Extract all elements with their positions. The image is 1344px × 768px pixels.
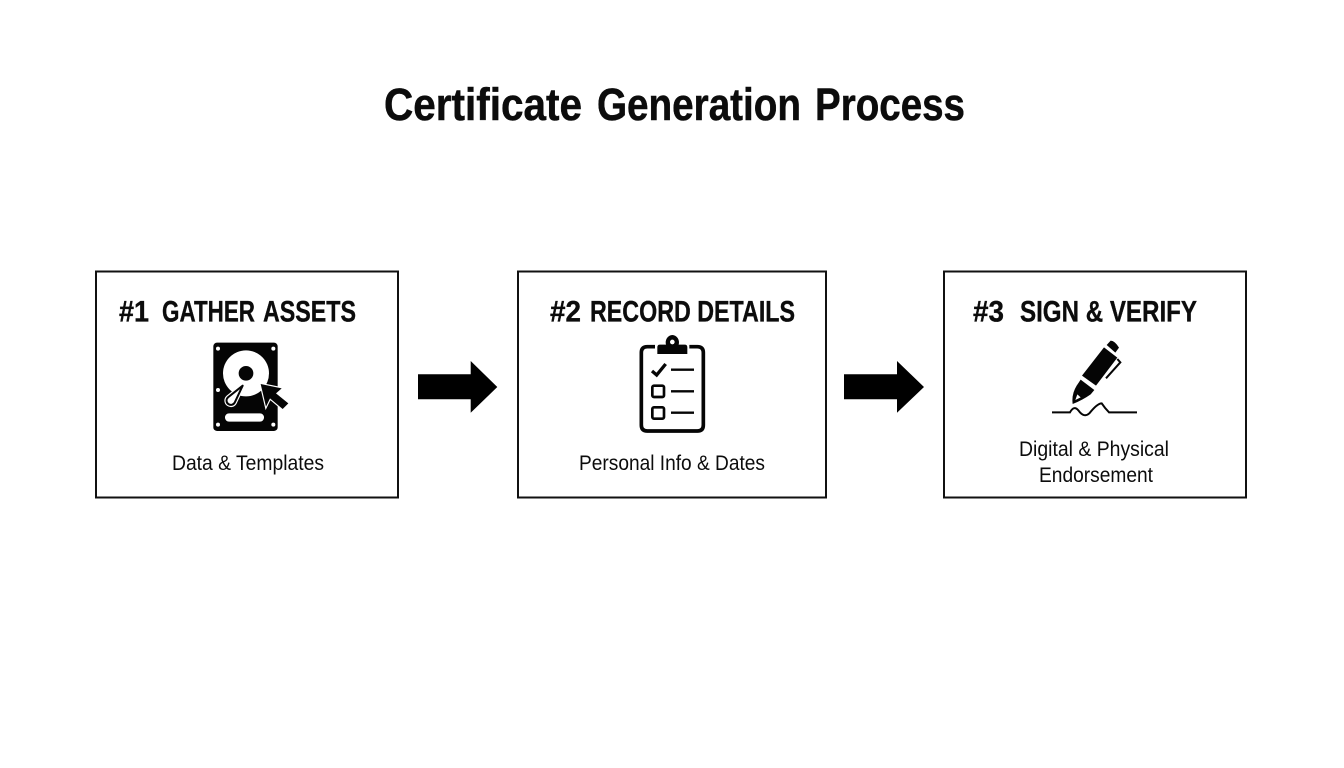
caption: step 3: Digital & Physical — [1019, 437, 1169, 461]
heading: step 2: RECORD DETAILS — [590, 296, 795, 328]
caption: step 3 — [1019, 437, 1169, 487]
caption: step 1: Data & Templates — [172, 451, 324, 475]
heading: step 1: GATHER — [162, 296, 255, 328]
icon: pen signing — [1052, 341, 1137, 415]
heading: step 3: SIGN & VERIFY — [1020, 296, 1197, 328]
heading: step 1 — [119, 296, 356, 328]
heading: step 3 — [973, 296, 1197, 328]
heading: step 3: #3 — [973, 296, 1004, 328]
title — [384, 79, 965, 130]
heading: step 1: ASSETS — [263, 296, 356, 328]
caption: step 2: Personal Info & Dates — [579, 451, 765, 475]
heading: step 2: #2 — [550, 296, 581, 328]
heading: step 1: #1 — [119, 296, 149, 328]
panel: step 2 record details — [518, 272, 826, 498]
title: Process — [815, 79, 965, 130]
caption: step 3: Endorsement — [1039, 463, 1153, 487]
arrow: step 1 to step 2 — [418, 361, 497, 413]
title: Certificate — [384, 79, 582, 130]
panel: step 3 sign and verify — [944, 272, 1246, 498]
icon: hard drive with cursor — [213, 343, 288, 431]
heading: step 2 — [550, 296, 795, 328]
panel: step 1 gather assets — [96, 272, 398, 498]
icon: clipboard checklist — [641, 335, 703, 431]
title: Generation — [597, 79, 801, 130]
arrow: step 2 to step 3 — [844, 361, 924, 413]
